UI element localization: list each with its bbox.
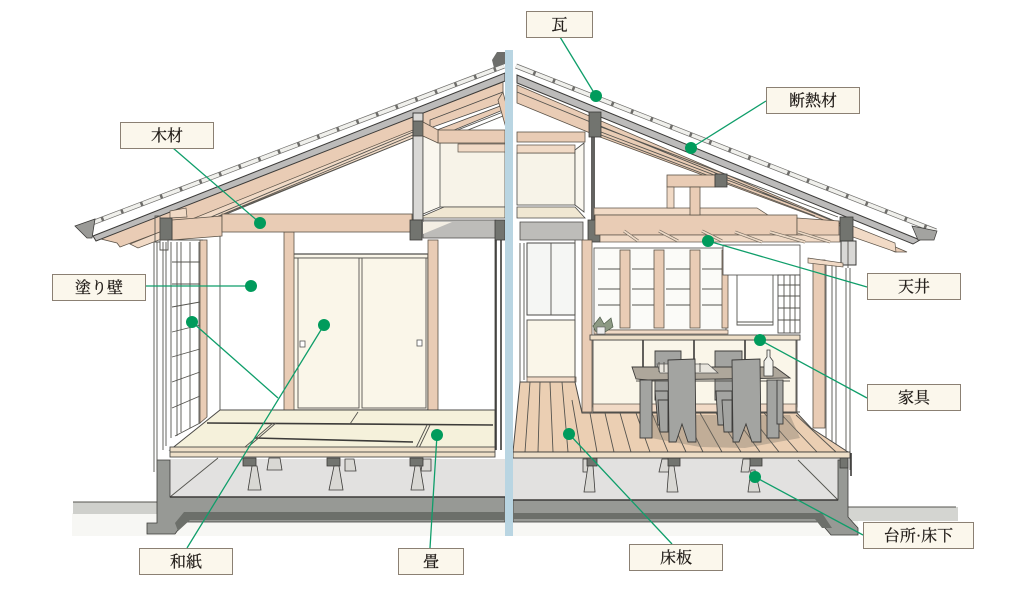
floor piers [243,458,762,492]
range hood [723,245,800,275]
front chairs [668,359,696,442]
label: furniture [868,384,960,410]
left beam structure and central attic [155,92,512,450]
ground and foundation: left half [72,458,505,536]
central divider [505,50,513,536]
leader line: ceiling [708,241,867,287]
leader line: tiles [560,37,596,96]
label: wood [120,122,214,148]
leader line: plastered wall [145,285,251,287]
ground and foundation: right half [513,458,958,536]
label: washi paper [140,548,232,574]
label: insulation: 断熱材 [789,92,837,110]
sliding fusuma doors [293,254,428,410]
leader line: floorboard [569,434,672,544]
dining table and chairs [632,350,790,442]
label: floorboard: 床板 [660,549,692,567]
leader line: washi [187,322,324,548]
label: washi paper: 和紙 [170,553,202,571]
label: wood: 木材 [151,127,183,145]
label: roof tile [526,12,592,38]
label: insulation [766,88,860,114]
label: plastered wall: 塗り壁 [75,279,123,297]
leader line: kitchen and underfloor [755,477,863,535]
bottle [764,350,773,376]
leader line: tatami [430,435,437,548]
tableware [657,364,718,373]
table legs [640,380,652,438]
marker dots [186,90,766,483]
label: tatami [398,548,464,574]
wood plank floor [513,382,851,476]
right attic, beams and joists [517,112,856,268]
right kitchen cupboard [590,245,800,413]
lattice window [778,275,800,333]
leader line: insulation [691,101,766,148]
left roof: rafters, insulation band and tiles [75,52,505,248]
right post and window doors [808,258,850,470]
label: furniture: 家具 [898,389,931,407]
label: plastered wall [52,274,146,300]
leader line: wood [173,148,260,223]
tabletop [632,367,790,380]
label: kitchen and underfloor [864,522,974,548]
icon: potted plant [593,317,613,334]
label: tatami: 畳 [423,553,439,571]
label: floorboard [630,544,722,570]
left room wall and sliding doors [220,232,495,450]
label: ceiling: 天井 [898,278,930,296]
label: ceiling [868,274,960,300]
back chairs [655,351,681,400]
tatami floor [170,410,495,457]
label: kitchen and underfloor: 台所·床下 [884,527,953,545]
left shoji lattice window [154,240,207,472]
label: roof tile: 瓦 [551,16,568,34]
right roof: rafters, insulation band and tiles [516,66,937,252]
right corridor door [520,240,592,452]
leader line: furniture [760,340,867,398]
